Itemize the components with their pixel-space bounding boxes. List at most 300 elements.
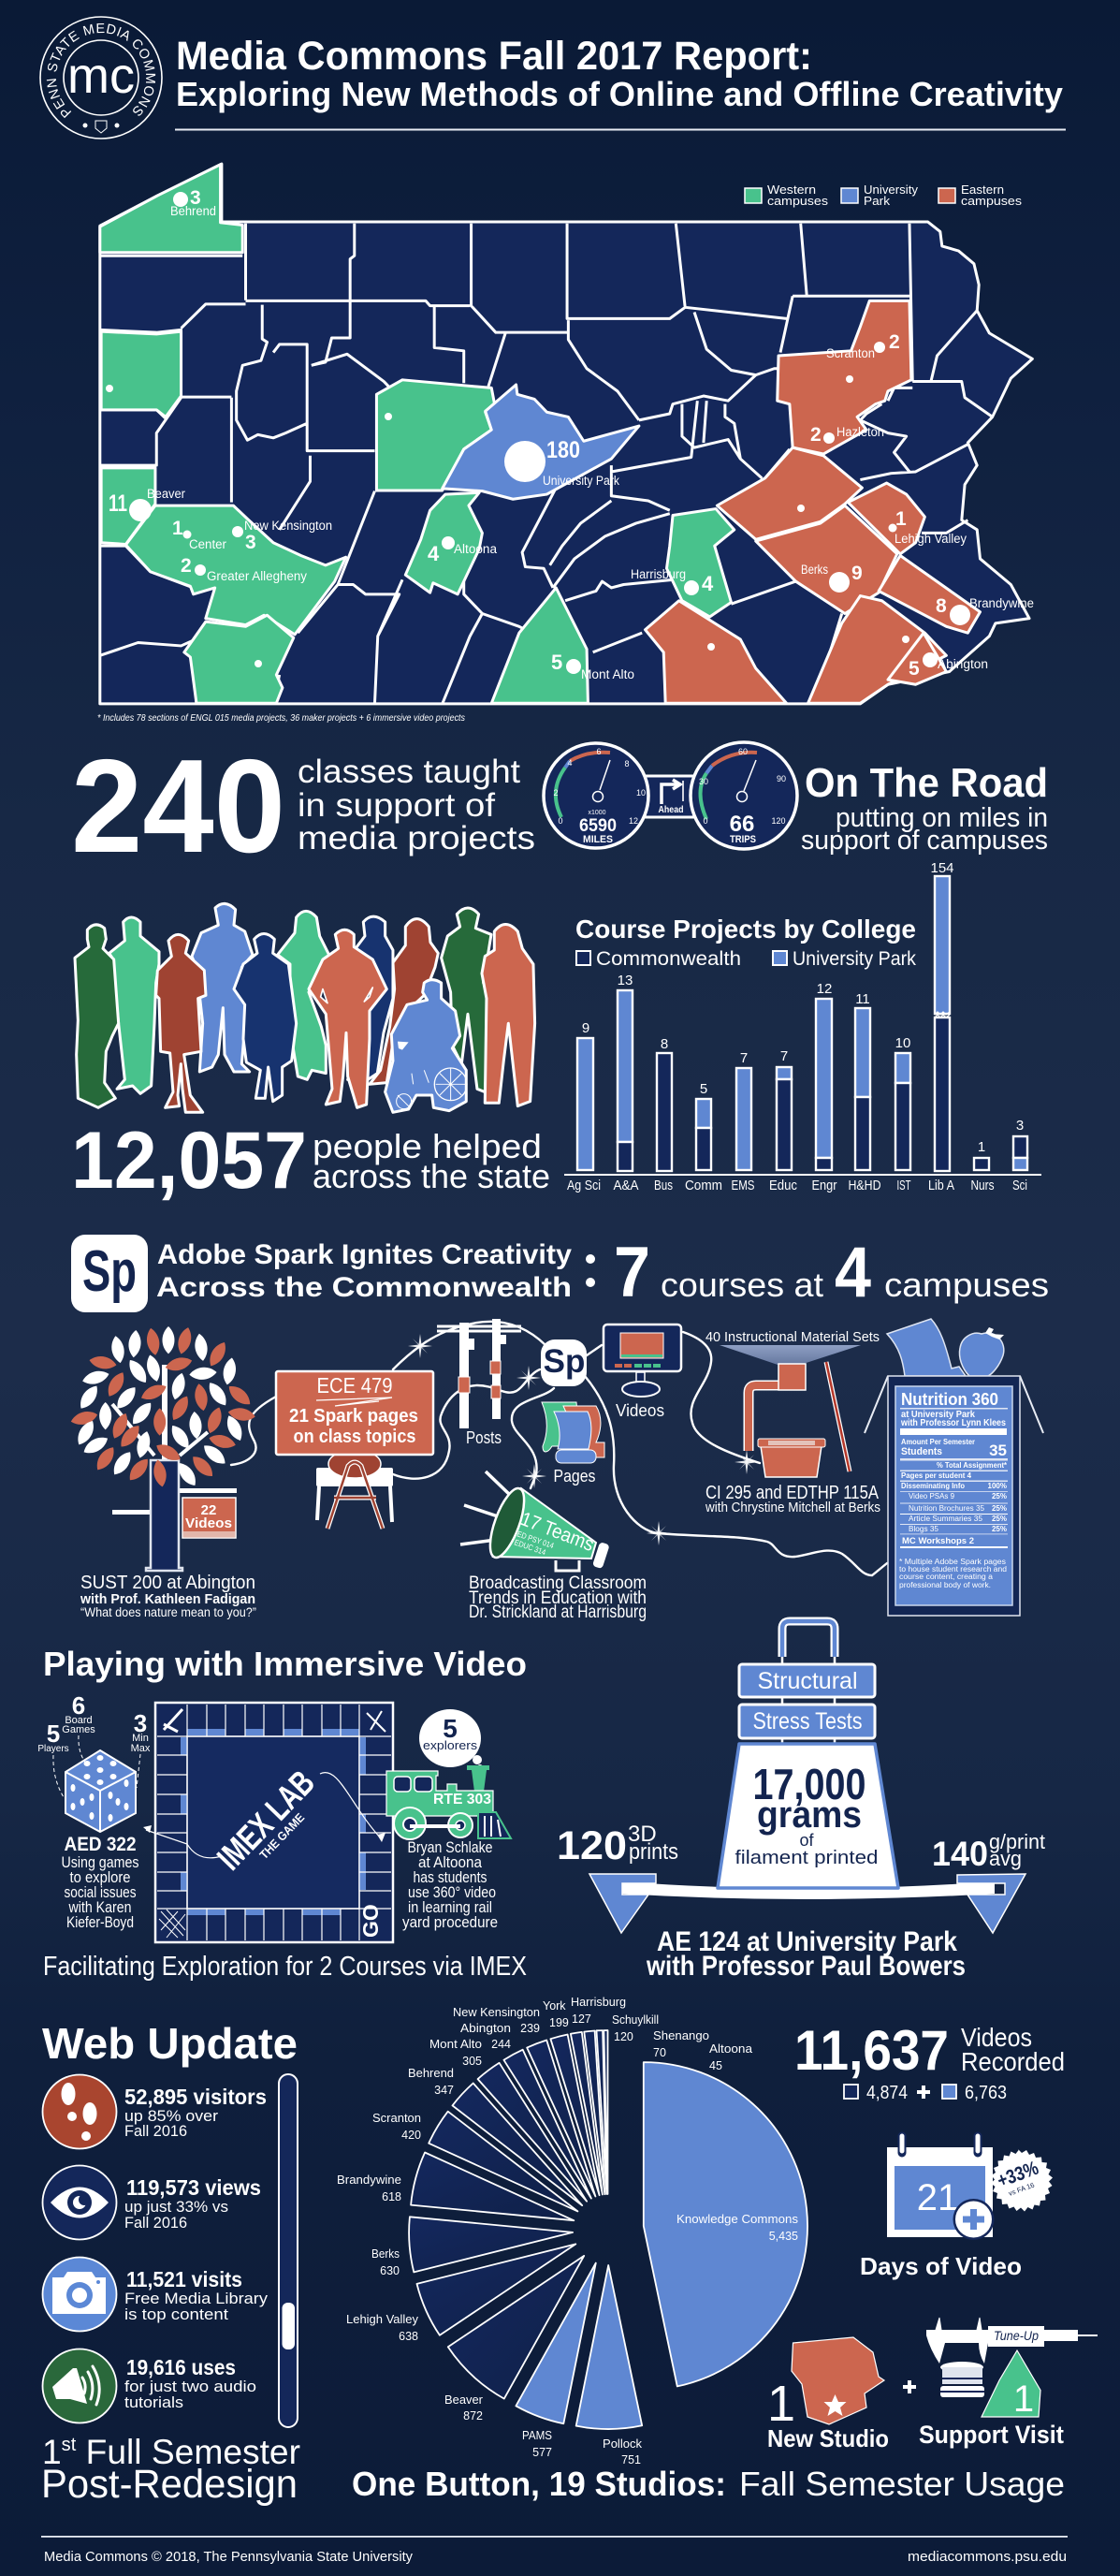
pie wedges (409, 2030, 807, 2429)
nutrition label text: Disseminating Info (901, 1482, 965, 1490)
map legend: University (864, 183, 918, 197)
stat: 120 3D prints: 120 (557, 1823, 627, 1868)
caption: SUST 200: “What does nature mean to you?” (80, 1605, 256, 1619)
bar category labels: Educ (769, 1178, 797, 1193)
icon: pages scrolls (542, 1402, 604, 1486)
campus labels and counts: Harrisburg (631, 567, 686, 581)
icon: posts utility poles (437, 1319, 521, 1447)
campus labels and counts: 5 (551, 651, 562, 674)
stat: visitors: 52,895 visitors (124, 2085, 267, 2109)
campus labels and counts: Mont Alto (581, 667, 634, 681)
caption: AE 124 (646, 1926, 966, 1982)
speech bubble: 5 explorers: 5 (443, 1714, 458, 1743)
pie labels: York (543, 1999, 566, 2012)
sparkles (408, 1334, 759, 1545)
project: CI 295 overhead projector: 40 Instructional Material Sets (705, 1329, 880, 1345)
icon: megaphone: ED PSY 014 (516, 1529, 556, 1550)
pie labels: Pollock (603, 2437, 643, 2451)
stat: visitors (43, 2074, 267, 2149)
logo: Penn State Media Commons seal: PENN STATE MEDIA COMMONS (47, 23, 155, 118)
caption: AED 322: to explore (69, 1869, 131, 1886)
campus labels and counts: 5 (909, 658, 920, 680)
plus sign (903, 2380, 916, 2393)
chart legend: University Park (793, 948, 916, 970)
caption: one button studios (352, 2465, 1065, 2503)
bar category labels: A&A (614, 1178, 638, 1193)
scrollbar (279, 2074, 298, 2427)
bar value labels: 1 (978, 1139, 985, 1155)
stat: 11,637 videos recorded: Recorded (961, 2047, 1065, 2076)
campus labels and counts: Scranton (826, 346, 875, 360)
caption: Bryan Schlake: yard procedure (402, 1914, 498, 1931)
IMEX LAB game board (143, 1703, 393, 1942)
stat: uses: tutorials (124, 2393, 183, 2411)
title: Exploring New Methods of Online and Offline Creativity (176, 75, 1063, 113)
stat: visits (43, 2258, 269, 2331)
title: Media Commons Fall 2017 Report: (176, 34, 812, 79)
pie labels: 305 (462, 2055, 482, 2068)
on the road text (801, 760, 1048, 856)
pie labels: 420 (401, 2129, 421, 2142)
icon: train RTE 303: RTE 303 (433, 1792, 491, 1808)
sign: 22 videos: Videos (185, 1515, 232, 1531)
bar category labels: H&HD (848, 1178, 881, 1193)
nutrition label text: 25% (992, 1504, 1007, 1513)
bar category labels: Comm (685, 1178, 722, 1193)
pie labels: Harrisburg (571, 1996, 626, 2009)
stat: 11,637 videos recorded: Videos (961, 2023, 1032, 2052)
stat: uses: 19,616 uses (126, 2355, 236, 2379)
campus labels and counts: Abington (938, 657, 988, 671)
bar value labels: 9 (582, 1020, 589, 1036)
gauge: miles: 2 (553, 788, 559, 798)
icon: support visit county: 1 (1013, 2378, 1034, 2420)
campus labels and counts: Greater Allegheny (207, 569, 307, 583)
caption: Bryan Schlake: use 360° video (408, 1884, 496, 1901)
map legend: Park (864, 194, 891, 208)
title (176, 34, 1063, 113)
pie labels: 751 (621, 2453, 641, 2466)
campus labels and counts: 2 (889, 331, 900, 353)
pie labels: 199 (549, 2016, 569, 2029)
icon: Sp bubble: Sp (544, 1343, 585, 1380)
nutrition label text: % Total Assignment* (937, 1461, 1008, 1470)
pie labels: New Kensington (453, 2006, 540, 2019)
heading: Adobe Spark ignites creativity: Adobe Spark Ignites Creativity (157, 1239, 572, 1270)
stat: visits: 11,521 visits (126, 2267, 242, 2291)
icon: dice with stats: Board (65, 1715, 93, 1726)
nutrition label text: 35 (989, 1442, 1007, 1459)
Pennsylvania county map (100, 164, 1032, 704)
bar category labels (567, 1178, 1027, 1193)
map legend: Eastern (961, 183, 1004, 197)
gauge: trips: 60 (738, 747, 748, 756)
icon: dice with stats: 6 (72, 1691, 85, 1720)
caption: AE 124: AE 124 at University Park (657, 1926, 957, 1957)
pie labels: 244 (491, 2038, 511, 2051)
bar category labels: Bus (654, 1178, 673, 1193)
gauge: trips: 30 (699, 777, 708, 786)
campus labels and counts: University Park (543, 474, 619, 488)
gauge: trips: 120 (771, 816, 786, 826)
legend: 4,874 + 6,763: 6,763 (965, 2083, 1007, 2103)
badge: +33% vs FA 16: +33% (995, 2158, 1041, 2192)
header (39, 16, 1066, 139)
campus labels and counts: Center (189, 537, 226, 551)
pie labels: Abington (460, 2022, 511, 2035)
nutrition label text: to house student research and (899, 1565, 1007, 1573)
bar chart: course projects by college (564, 860, 1041, 1193)
panel: campus map (97, 164, 1034, 724)
icon: megaphone: 17 Teams (517, 1508, 597, 1556)
caption: first full semester post-redesign: Post-Redesign (41, 2462, 298, 2507)
campus labels and counts: 4 (702, 572, 714, 595)
icon: videos monitor (604, 1325, 681, 1420)
icon: dice with stats: 3 (134, 1709, 147, 1737)
bar value labels: 10 (895, 1035, 910, 1051)
speech bubble: 5 explorers: explorers (423, 1738, 478, 1752)
gauge: miles: 0 (558, 816, 563, 826)
bar value labels: 3 (1016, 1118, 1024, 1134)
bar chart: course projects by college: Course Projects by College (575, 915, 916, 944)
project: ECE 479 desk: 21 Spark pages (289, 1406, 418, 1427)
campus labels and counts: Hazleton (836, 425, 884, 439)
icon: dice with stats (37, 1691, 151, 1832)
icon: megaphone: EDUC 314 (513, 1537, 547, 1557)
IMEX LAB game board: GO (358, 1904, 383, 1938)
gauge: trips: 0 (703, 816, 708, 826)
caption: AED 322: Using games (62, 1854, 138, 1871)
bar value labels: 13 (618, 973, 633, 988)
caption: AED 322: Kiefer-Boyd (66, 1914, 134, 1931)
stat: 240 classes: media projects (298, 820, 535, 856)
icon: dice with stats: Min (132, 1733, 149, 1744)
stat: 12,057 people helped (71, 1116, 550, 1206)
nutrition label text: Video PSAs 9 (909, 1492, 955, 1500)
icon: dice with stats: Max (131, 1743, 151, 1754)
pie labels: 5,435 (769, 2230, 798, 2243)
on the road text: putting on miles in (836, 803, 1048, 833)
stat: 11,637 videos recorded (794, 2019, 1065, 2082)
stat: 11,637 videos recorded: 11,637 (794, 2019, 949, 2082)
gauge: trips: TRIPS (730, 834, 756, 845)
panel: 3D print scale (557, 1621, 1045, 1982)
pie labels: Berks (371, 2247, 400, 2261)
panel: Adobe Spark (69, 1233, 1049, 1622)
stat: 240 classes: classes taught (298, 754, 520, 790)
gauge: miles: MILES (583, 834, 613, 845)
caption: CI 295 and EDTHP 115A: with Chrystine Mitchell at Berks (705, 1500, 880, 1515)
bar category labels: Sci (1012, 1178, 1027, 1193)
pie labels: 618 (382, 2190, 401, 2203)
bar value labels (582, 860, 1024, 1155)
badge: +33% vs FA 16 (991, 2149, 1053, 2211)
icon: new studio county: 1 (767, 2376, 795, 2432)
stat: visits: is top content (124, 2305, 228, 2323)
nutrition label text: at University Park (901, 1410, 975, 1420)
caption: AED 322: AED 322 (64, 1834, 137, 1855)
caption: first full semester post-redesign: 1 (42, 2433, 62, 2471)
caption: broadcasting classroom: Dr. Strickland at Harrisburg (469, 1603, 647, 1622)
icon: pages scrolls: Pages (554, 1467, 595, 1486)
caption: first full semester post-redesign (41, 2433, 300, 2507)
footer: Media Commons © 2018, The Pennsylvania State University (44, 2549, 413, 2565)
nutrition label text: 25% (992, 1515, 1007, 1523)
project: ECE 479 desk: ECE 479 (316, 1373, 393, 1398)
campus dots (106, 192, 970, 674)
caption: Bryan Schlake (402, 1839, 498, 1931)
logo: Penn State Media Commons seal: mc (67, 48, 135, 104)
weight: 17,000 grams: of (799, 1831, 815, 1850)
stat: 12,057 people helped: 12,057 (71, 1116, 307, 1206)
gauge: miles: 4 (567, 758, 573, 768)
stat: 240 classes (71, 732, 535, 881)
icon: calendar 21 days (887, 2136, 994, 2240)
sign: 22 videos: 22 (201, 1502, 216, 1518)
balance beam and pans (589, 1874, 1025, 1933)
nutrition label text: course content, creating a (899, 1573, 994, 1581)
icon: calendar 21 days: 21 (917, 2177, 958, 2218)
pie labels: 120 (614, 2030, 633, 2043)
stat: 140 g per print: g/print (989, 1830, 1045, 1853)
caption: one button studios: Fall Semester Usage (739, 2465, 1065, 2503)
IMEX LAB game board: IMEX LAB (210, 1764, 322, 1878)
campus labels and counts: 1 (895, 508, 907, 530)
map legend (745, 183, 1023, 208)
project: ECE 479 desk: on class topics (294, 1427, 415, 1447)
heading: web update: Web Update (42, 2019, 298, 2068)
campus labels and counts: 11 (109, 490, 127, 517)
campus labels and counts: 3 (190, 187, 201, 209)
bar category labels: Lib A (928, 1178, 954, 1193)
campus labels and counts: 2 (810, 424, 822, 446)
stat: 7 courses at 4 campuses: campuses (884, 1266, 1049, 1304)
bar category labels: Ag Sci (567, 1178, 601, 1193)
map legend: campuses (961, 194, 1023, 208)
panel: immersive video (37, 1645, 527, 1982)
stat: 12,057 people helped: across the state (313, 1157, 550, 1195)
caption: broadcasting classroom: Trends in Education with (469, 1588, 647, 1608)
nutrition label text: with Professor Lynn Klees (900, 1418, 1006, 1428)
project: ECE 479 desk (276, 1371, 433, 1529)
pie labels: Shenango (653, 2029, 709, 2042)
stat: views: 119,573 views (126, 2175, 261, 2200)
panel: videos recorded (794, 2019, 1065, 2280)
caption: Bryan Schlake: in learning rail (408, 1899, 492, 1916)
campus labels and counts: 180 (546, 437, 580, 463)
stat: 120 3D prints (557, 1822, 678, 1868)
icon: Sp logo (71, 1235, 148, 1312)
sign: 22 videos (182, 1498, 236, 1538)
caption: AED 322: social issues (64, 1884, 137, 1901)
connector with ahead sign: Ahead (659, 805, 683, 815)
caption: support visit: Support Visit (919, 2421, 1064, 2449)
campus labels and counts: Lehigh Valley (895, 532, 967, 546)
stat: 140 g per print: 140 (932, 1835, 988, 1873)
nutrition label text: * Multiple Adobe Spark pages (899, 1558, 1006, 1566)
panel: on the road gauges (544, 742, 1048, 856)
weights: structural stress tests (739, 1621, 875, 1746)
badge: +33% vs FA 16: vs FA 16 (1008, 2181, 1036, 2198)
pie labels: Knowledge Commons (676, 2213, 798, 2226)
caption: broadcasting classroom: Broadcasting Classroom (469, 1573, 647, 1593)
stat: 240 classes: 240 (71, 732, 285, 881)
caption: AED 322 (62, 1834, 138, 1931)
campus labels and counts: 8 (936, 595, 947, 617)
weight: 17,000 grams: grams (757, 1794, 862, 1836)
nutrition label text: Students (901, 1446, 942, 1457)
nutrition label text: Nutrition 360 (901, 1390, 998, 1409)
pie labels: Mont Alto (429, 2038, 482, 2051)
caption: CI 295 and EDTHP 115A: CI 295 and EDTHP 115A (705, 1483, 880, 1503)
panel: One Button studios pie chart (337, 1996, 1065, 2503)
IMEX LAB game board: THE GAME (256, 1810, 307, 1862)
stat: 7 courses at 4 campuses: 7 (614, 1233, 650, 1312)
speech bubble: 5 explorers (419, 1709, 483, 1770)
pie labels: Schuylkill (612, 2013, 659, 2027)
bar category labels: Engr (812, 1178, 837, 1193)
on the road text: On The Road (805, 760, 1048, 806)
caption: SUST 200: with Prof. Kathleen Fadigan (80, 1591, 255, 1607)
caption: AE 124: with Professor Paul Bowers (646, 1951, 966, 1982)
nutrition label text: Blogs 35 (909, 1525, 939, 1533)
footer (41, 2536, 1068, 2565)
heading: playing with immersive video: Playing with Immersive Video (43, 1645, 527, 1683)
campus labels and counts: Brandywine (969, 596, 1034, 610)
icon: new studio county (767, 2337, 884, 2432)
weight: 17,000 grams: 17,000 (752, 1760, 866, 1808)
pie labels (337, 1996, 798, 2466)
stat: 7 courses at 4 campuses: 4 (835, 1233, 871, 1312)
gauge: miles: x1000 (588, 810, 606, 816)
bar value labels: 7 (740, 1050, 748, 1066)
legend: 4,874 + 6,763: 4,874 (866, 2083, 908, 2103)
stat: views (43, 2166, 261, 2239)
bar category labels: EMS (732, 1178, 754, 1193)
stat: 120 3D prints: prints (629, 1839, 678, 1865)
stat: visitors: Fall 2016 (124, 2122, 187, 2140)
campus labels and counts: 9 (851, 563, 863, 584)
panel: new studio and support visit (767, 2318, 1098, 2452)
nutrition label text: 25% (992, 1492, 1007, 1500)
footer: mediacommons.psu.edu (908, 2549, 1067, 2565)
pie labels: 239 (520, 2022, 540, 2035)
stat: 7 courses at 4 campuses (614, 1233, 1049, 1312)
project: CI 295 overhead projector (705, 1329, 880, 1477)
icon: train RTE 303 (386, 1765, 511, 1839)
pie labels: Beaver (444, 2393, 483, 2407)
caption: Bryan Schlake: has students (414, 1869, 487, 1886)
caption: CI 295 and EDTHP 115A (705, 1483, 880, 1515)
nutrition label text: MC Workshops 2 (902, 1536, 974, 1545)
bar value labels: 11 (855, 991, 870, 1007)
pie labels: Altoona (709, 2042, 752, 2056)
stat: views: Fall 2016 (124, 2214, 187, 2232)
weight: 17,000 grams: filament printed (735, 1848, 878, 1868)
caption: Bryan Schlake: at Altoona (418, 1854, 483, 1871)
bar value labels: 154 (930, 860, 954, 876)
stat: 240 classes: in support of (298, 787, 495, 824)
on the road text: support of campuses (801, 826, 1048, 856)
campus labels and counts: 4 (428, 542, 440, 565)
caption: broadcasting classroom (469, 1573, 647, 1622)
gauge: miles: 12 (629, 816, 638, 826)
icon: tune-up caliper (926, 2318, 1098, 2397)
stat: 12,057 people helped: people helped (313, 1127, 542, 1165)
stat: 120 3D prints: 3D (628, 1822, 657, 1847)
caption: SUST 200 (80, 1573, 256, 1619)
campus labels and counts: New Kensington (244, 519, 332, 533)
stat: visitors: up 85% over (124, 2107, 218, 2125)
pie labels: PAMS (522, 2429, 552, 2442)
icon: posts utility poles: Posts (466, 1428, 502, 1447)
icon: tune-up caliper: Tune-Up (994, 2328, 1039, 2343)
chart legend: Commonwealth (596, 948, 741, 970)
pie labels: Lehigh Valley (346, 2313, 419, 2326)
pie labels: Behrend (408, 2067, 454, 2080)
campus labels and counts: Berks (801, 563, 828, 577)
caption: AED 322: with Karen (68, 1899, 131, 1916)
map legend: campuses (767, 194, 829, 208)
bar category labels: IST (896, 1178, 911, 1193)
nutrition label text: Article Summaries 35 (909, 1515, 983, 1523)
stat: views: up just 33% vs (124, 2198, 228, 2216)
project: Nutrition 360 box (865, 1319, 1043, 1616)
weights: structural stress tests: Stress Tests (752, 1708, 863, 1734)
bar value labels: 5 (700, 1081, 707, 1097)
bar value labels: 12 (817, 981, 832, 997)
bar category labels: Nurs (971, 1178, 994, 1193)
bar value labels: 8 (661, 1036, 668, 1052)
pie labels: 872 (463, 2409, 483, 2422)
icon: videos monitor: Videos (616, 1401, 664, 1420)
panel: web update (41, 2019, 300, 2507)
bars (577, 876, 1027, 1171)
pie labels: 70 (653, 2046, 666, 2059)
stat: uses (43, 2349, 256, 2422)
pie labels: 45 (709, 2059, 722, 2072)
campus labels and counts: 1 (172, 518, 183, 539)
caption: Bryan Schlake: Bryan Schlake (408, 1839, 492, 1856)
icon: dice with stats: Games (62, 1724, 95, 1735)
campus labels and counts: Behrend (170, 204, 216, 218)
pie labels: 127 (572, 2012, 591, 2026)
caption: days of video: Days of Video (860, 2252, 1022, 2280)
chart legend (576, 948, 916, 970)
connector lines (231, 1322, 887, 1575)
subheading: facilitating exploration: Facilitating Exploration for 2 Courses via IMEX (43, 1952, 527, 1982)
nutrition label text: Nutrition Brochures 35 (909, 1504, 985, 1513)
gauge: trips: 90 (777, 774, 786, 783)
caption: one button studios: One Button, 19 Studios: (352, 2465, 726, 2503)
gauge: miles: 6590 (579, 816, 617, 836)
gauge: miles: 6 (596, 747, 602, 756)
nutrition label text: 100% (988, 1482, 1007, 1490)
icon: dice with stats: 5 (47, 1720, 60, 1748)
people silhouettes (75, 903, 535, 1112)
nutrition label text: professional body of work. (899, 1581, 991, 1589)
legend: 4,874 + 6,763 (844, 2083, 1007, 2103)
heading: Adobe Spark ignites creativity: Across the Commonwealth (156, 1272, 572, 1303)
campus labels and counts (109, 187, 1034, 681)
gauge: miles (544, 743, 648, 848)
nutrition label text: Amount Per Semester (901, 1438, 975, 1446)
gauge: miles: 8 (624, 759, 630, 768)
gauge: trips: 66 (730, 812, 754, 837)
pie labels: 638 (399, 2330, 418, 2343)
icon: paper and apple (887, 1319, 1004, 1376)
icon: support visit county (982, 2350, 1040, 2420)
